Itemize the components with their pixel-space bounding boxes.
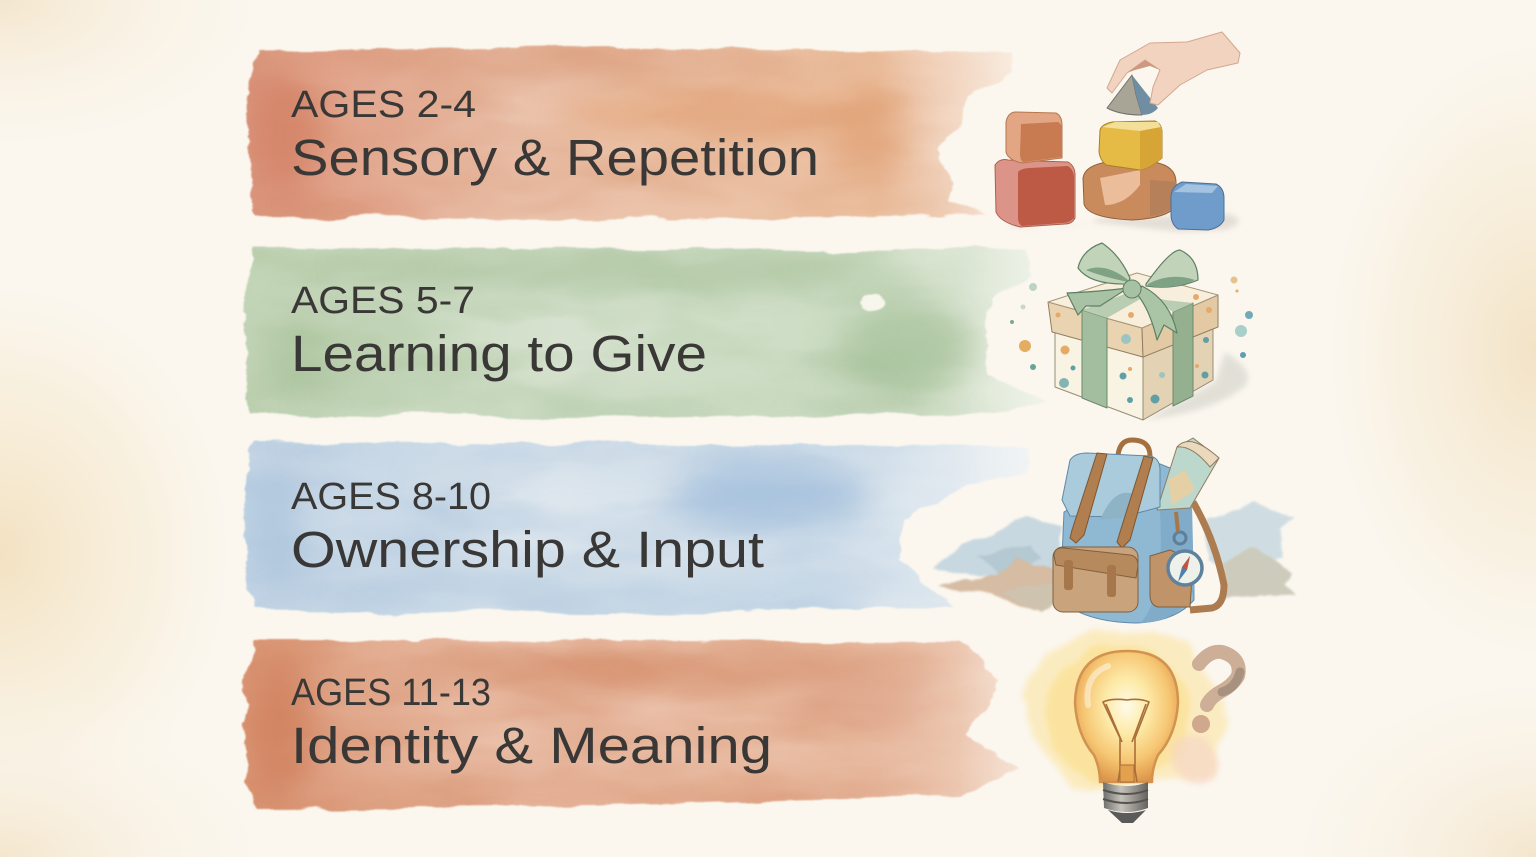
icon: gift box: [1010, 243, 1253, 420]
band 4: ages 11-13: [240, 632, 1030, 814]
band 3 title: Ownership & Input: [291, 521, 764, 578]
band 4 wash: [240, 632, 1030, 814]
band 4 age label: AGES 11-13: [291, 672, 491, 714]
band 3 wash: [240, 435, 1040, 620]
icon: backpack with map and compass: [932, 438, 1297, 623]
band 1 wash: [240, 40, 1030, 230]
band 1: ages 2-4: [240, 40, 1030, 230]
mountains behind pack: [932, 502, 1297, 612]
band 2 title: Learning to Give: [291, 325, 707, 382]
band 2: ages 5-7: [240, 240, 1055, 420]
band 2 wash: [240, 240, 1055, 420]
icon: light bulb with question mark: [1023, 630, 1240, 823]
band 1 title: Sensory & Repetition: [291, 129, 819, 186]
band 4 title: Identity & Meaning: [291, 717, 772, 774]
band 2 age label: AGES 5-7: [291, 280, 475, 322]
icon: wooden blocks and hand: [995, 32, 1240, 232]
band 3 age label: AGES 8-10: [291, 476, 491, 518]
band 3: ages 8-10: [240, 435, 1040, 620]
band 1 age label: AGES 2-4: [291, 84, 476, 126]
